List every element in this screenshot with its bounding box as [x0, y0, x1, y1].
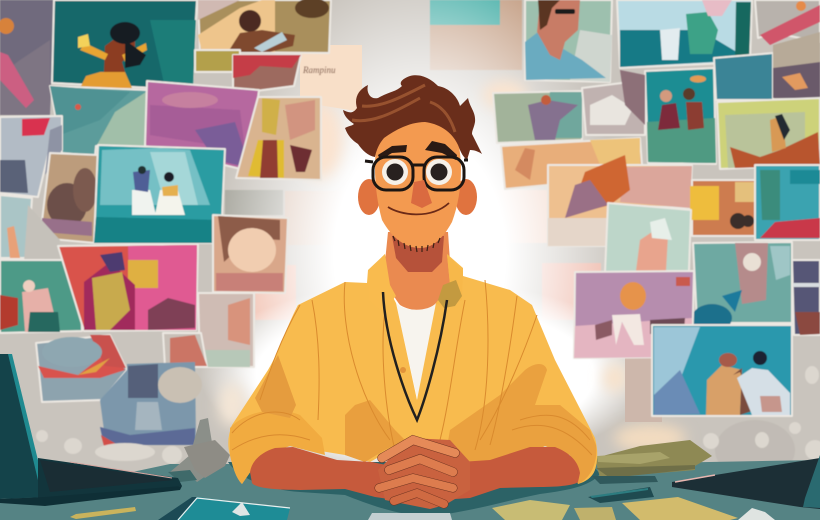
- arm shadow on desk: [228, 462, 600, 516]
- panel: blue room: [755, 165, 820, 240]
- collar left: [368, 254, 396, 312]
- soft glow patches low on the wall: [218, 81, 686, 452]
- loose papers: [492, 497, 775, 520]
- elbow shadow left: [255, 355, 296, 418]
- smile: [388, 203, 449, 214]
- panel: yellow character: [236, 97, 321, 180]
- wall stains lower right: [703, 366, 820, 460]
- panel: sepia riders: [40, 153, 98, 243]
- panel: brown reading figure: [198, 0, 331, 53]
- hair: [343, 75, 482, 160]
- shirt: [228, 254, 597, 484]
- white glow behind the artist: [215, 0, 625, 520]
- panel: faded tan column: [625, 358, 662, 422]
- panel: light teal: [50, 86, 147, 156]
- stubble: [393, 236, 440, 252]
- panel: face close-up: [213, 215, 288, 293]
- panel: red plane: [233, 55, 301, 94]
- panel: blue scene with deer and woman: [652, 325, 792, 416]
- panel: figure in mechanic scene: [493, 91, 582, 143]
- sleeve shade left: [230, 410, 325, 484]
- shirt seam lines: [232, 280, 592, 455]
- collage: right side artwork panels: [493, 0, 820, 480]
- panel: orange figure with pinks: [548, 155, 692, 246]
- left laptop: [0, 354, 182, 506]
- panel: dark teal dancer: [52, 0, 197, 90]
- left ear: [358, 179, 380, 215]
- body shadow left: [345, 400, 405, 462]
- scribbled note on peach panel: Rampinu: [302, 65, 336, 75]
- panel: sunset orange: [501, 138, 642, 189]
- lower white glow beside the arms: [200, 280, 650, 470]
- artist: [228, 75, 597, 509]
- hair highlights: [352, 85, 455, 132]
- button: [400, 367, 406, 373]
- collage: left side artwork panels: [0, 0, 336, 464]
- neck: [385, 232, 450, 310]
- panel: pink crowd: [145, 81, 259, 171]
- panel: green scene with mask figure: [0, 260, 82, 333]
- desk: [0, 460, 820, 520]
- nose: [411, 180, 432, 208]
- eyes: [382, 159, 452, 185]
- panel: faded peach note: [300, 45, 362, 112]
- face: [375, 112, 461, 248]
- panel: purple workshop: [574, 271, 694, 358]
- glasses: [365, 157, 468, 190]
- panel: blue grey machine: [100, 362, 202, 446]
- collar shadow: [438, 280, 462, 308]
- panel: teal lagoon duet: [94, 145, 225, 243]
- panel: olive room with orange figure: [717, 98, 820, 169]
- panel: small yellow: [195, 50, 240, 72]
- body shadow right: [445, 364, 596, 484]
- lanyard: [383, 292, 447, 420]
- left forearm: [250, 447, 400, 500]
- right forearm: [430, 447, 580, 500]
- phones: [588, 476, 658, 503]
- right laptop: [672, 455, 820, 509]
- panel: red magenta hooded figure: [58, 244, 198, 331]
- panel: grey with red streak: [755, 0, 820, 45]
- centre sheet: [368, 513, 452, 520]
- panel: teal lab scene: [617, 0, 752, 68]
- icon: paper sculpture: [168, 418, 230, 482]
- panel: pink squares: [163, 333, 207, 367]
- wall shadow lower right: [715, 420, 795, 480]
- panel: teal owl figure: [692, 242, 792, 332]
- right ear: [455, 179, 477, 215]
- tablet: [158, 497, 290, 520]
- panel: pale green old man: [605, 203, 691, 272]
- eyebrows: [378, 141, 457, 160]
- panel: purple scene with pink legs: [0, 0, 54, 115]
- pencil: [70, 507, 136, 519]
- panel: whale: [36, 335, 127, 402]
- panel: grey strip: [24, 205, 60, 262]
- undershirt: [396, 303, 436, 398]
- panel: muted figure strip: [198, 293, 254, 367]
- neck shadow: [392, 236, 444, 272]
- collage: washed-out panels behind the glow: [225, 0, 601, 320]
- panel: pale grey with red: [0, 116, 62, 197]
- collar right: [436, 254, 463, 308]
- wall stains lower left: [36, 430, 182, 464]
- stack of books: [595, 440, 712, 478]
- panel: man with glasses and blue shirt: [525, 0, 612, 82]
- panel: pale portrait: [0, 195, 32, 258]
- panel: pale twisted figure: [582, 70, 645, 135]
- panel: orange room with yellow window: [690, 180, 755, 236]
- panel: kids holding hands: [645, 68, 716, 164]
- panel: dark purple: [792, 260, 820, 335]
- clasped hands: [378, 438, 470, 509]
- panel: teal robot: [714, 53, 773, 100]
- panel: purple hand: [773, 32, 820, 98]
